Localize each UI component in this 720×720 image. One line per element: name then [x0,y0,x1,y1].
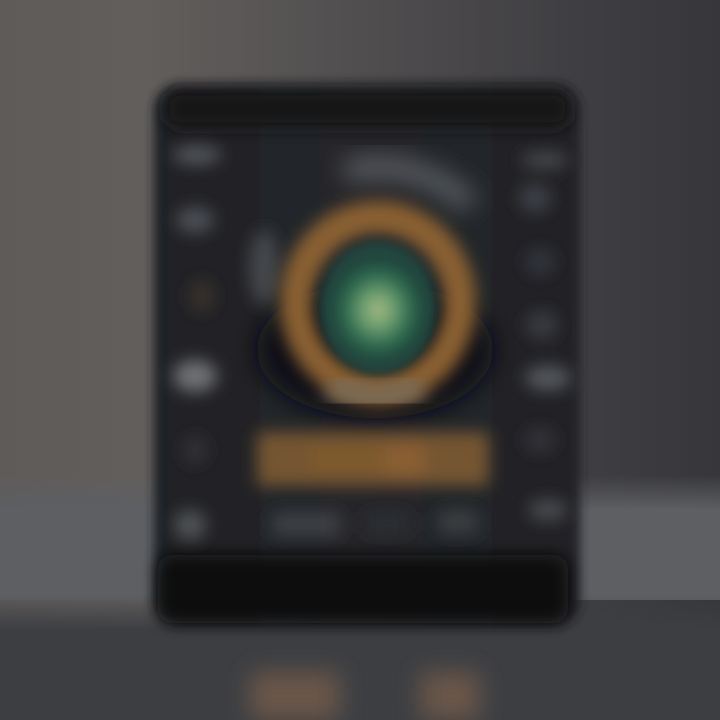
gauge lower shadow [257,282,493,418]
orange reflection on table [250,672,480,720]
gauge tan ring bottom [330,384,420,397]
gauge green core [328,256,428,364]
device body [154,85,580,625]
gauge top highlight [345,168,470,205]
device bottom band [158,555,568,623]
right column of blurred icons [519,152,571,521]
table foreground [0,630,720,720]
table surface fade-in [0,475,720,510]
left column of blurred icons [173,146,221,540]
table surface [0,510,720,600]
gauge orange ring [296,217,460,389]
orange blurred label bar [257,432,489,486]
grey blurred caption text [272,510,478,536]
gauge [249,168,493,418]
gauge left grey patch [249,230,279,306]
device top band [165,90,570,128]
table foreground fade-in [0,595,720,630]
gauge inner dark ring [320,242,436,374]
